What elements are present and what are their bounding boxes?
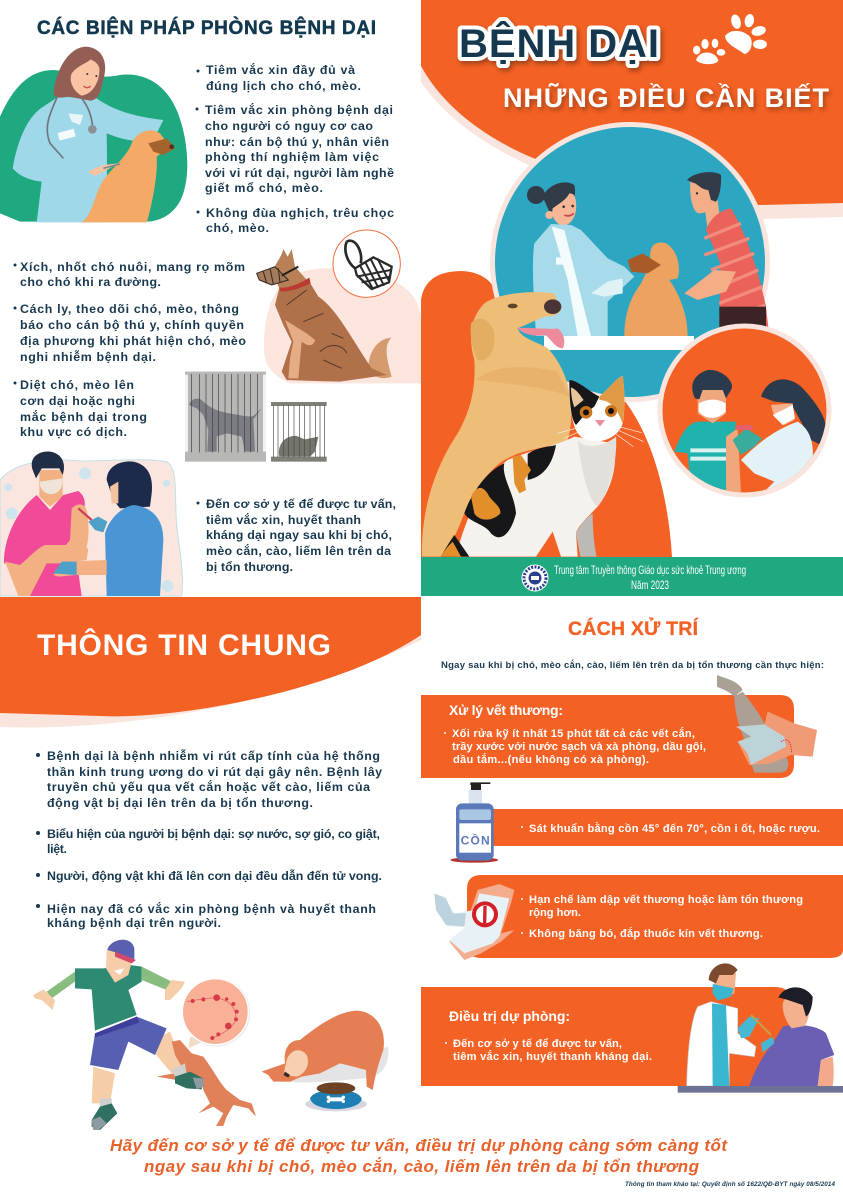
- text: treatment: [445, 1038, 652, 1063]
- heading: general information: THÔNG TIN CHUNG: [37, 628, 331, 662]
- text: isolate and monitor: Cách ly, theo dõi chó, mèo, thông: [20, 302, 239, 316]
- panel: cover: [421, 0, 843, 596]
- text: wash wound: dầu tắm...(nếu không có xà phòng).: [453, 753, 649, 766]
- text: what is rabies: thần kinh trung ương do vi rút dại gây nên. Bệnh lây: [47, 765, 382, 779]
- text: reference source: Thông tin tham khảo tại: Quyết định số 1622/QĐ-BYT ngày 08/5/2014: [625, 1180, 835, 1188]
- text: vaccinate pets: đúng lịch cho chó, mèo.: [206, 79, 361, 93]
- card: post exposure treatment: [421, 963, 843, 1093]
- illustration: caged animals: [185, 372, 327, 462]
- text: seek medical care: Đến cơ sở y tế để được tư vấn,: [206, 497, 396, 511]
- text: do not tease: Không đùa nghịch, trêu chọc: [206, 206, 394, 220]
- heading: wound care: Xử lý vết thương:: [449, 702, 563, 718]
- heading: how to respond: CÁCH XỬ TRÍ: [568, 616, 699, 640]
- text: avoid crushing wound: rộng hơn.: [529, 907, 581, 919]
- icon: alcohol bottle: [450, 782, 498, 863]
- text: vaccinate at risk people: phòng thí nghiệm làm việc: [205, 150, 379, 164]
- text: seek medical care: tiêm vắc xin, huyết thanh: [206, 512, 361, 527]
- text: treatment: Đến cơ sở y tế để được tư vấn,: [453, 1038, 622, 1050]
- text: symptoms: Biểu hiện của người bị bệnh dại: sợ nước, sợ gió, co giật,: [47, 827, 380, 841]
- illustration: vet, dog and man: [527, 172, 769, 337]
- text: vaccinate at risk people: với vi rút dại, người làm nghề: [205, 166, 394, 180]
- illustration: vet with dog: [0, 47, 187, 222]
- text: wash wound: Xối rửa kỹ ít nhất 15 phút tất cả các vết cắn,: [452, 727, 695, 740]
- illustration: muzzled dog: [257, 230, 421, 383]
- text: seek medical care: mèo cắn, cào, liếm lên trên da: [206, 543, 391, 558]
- panel: how to respond: [421, 616, 843, 1093]
- text: isolate and monitor: nghi nhiễm bệnh dại.: [20, 349, 156, 364]
- panel: prevention measures: [0, 17, 421, 596]
- callout: seek care early: ngay sau khi bị chó, mèo cắn, cào, liếm lên trên da bị tổn thương: [144, 1157, 700, 1176]
- text: avoid crushing wound: [521, 894, 803, 919]
- text: vaccine exists: [36, 901, 376, 930]
- text: avoid crushing wound: Hạn chế làm dập vết thương hoặc làm tổn thương: [529, 894, 803, 906]
- text: seek medical care: [196, 497, 396, 574]
- icon: paw prints: [693, 13, 767, 64]
- text: what is rabies: Bệnh dại là bệnh nhiễm vi rút cấp tính của hệ thống: [47, 748, 380, 763]
- text: vaccinate pets: [196, 62, 361, 93]
- heading: treatment: Điều trị dự phòng:: [449, 1008, 570, 1024]
- panel: general information: [0, 597, 421, 1130]
- illustration: dog and cat: [422, 292, 644, 557]
- text: cull rabid animals: Diệt chó, mèo lên: [20, 378, 134, 392]
- text: isolate and monitor: [14, 302, 246, 364]
- text: isolate and monitor: báo cho cán bộ thú y, chính quyền: [20, 318, 244, 332]
- text: what is rabies: động vật bị dại lên trên da bị tổn thương.: [47, 796, 313, 810]
- text: fatal outcome: Người, động vật khi đã lên cơn dại đều dẫn đến tử vong.: [47, 868, 382, 883]
- text: year: Năm 2023: [631, 578, 669, 592]
- text: symptoms: liệt.: [47, 842, 67, 856]
- text: cull rabid animals: cơn dại hoặc nghi: [20, 394, 135, 408]
- card: wound washing: [421, 675, 817, 778]
- heading: prevention: CÁC BIỆN PHÁP PHÒNG BỆNH DẠI: [37, 17, 376, 39]
- text: disinfect: Sát khuẩn bằng cồn 45° đến 70°, cồn i ốt, hoặc rượu.: [529, 822, 820, 835]
- text: do not cover wound: Không băng bó, đắp thuốc kín vết thương.: [529, 927, 763, 940]
- footer band: [421, 557, 843, 596]
- text: intro: Ngay sau khi bị chó, mèo cắn, cào, liếm lên trên da bị tổn thương cần thực hiện:: [441, 659, 824, 671]
- callout: seek care early: [110, 1136, 728, 1176]
- text: wash wound: trầy xước với nước sạch và xà phòng, dầu gội,: [452, 741, 706, 753]
- text: leash and muzzle: Xích, nhốt chó nuôi, mang rọ mõm: [20, 260, 245, 274]
- illustration: man bitten by dog: [33, 940, 256, 1130]
- text: wash wound: [444, 727, 706, 766]
- text: leash and muzzle: [14, 260, 245, 289]
- text: vaccinate at risk people: Tiêm vắc xin phòng bệnh dại: [205, 102, 393, 117]
- text: cull rabid animals: mắc bệnh dại trong: [20, 409, 147, 424]
- text: vaccinate at risk people: cho người có nguy cơ cao: [205, 119, 373, 133]
- illustration: dog eating: [262, 1011, 389, 1111]
- text: cull rabid animals: khu vực có dịch.: [20, 425, 127, 439]
- text: seek medical care: kháng dại ngay sau khi bị chó,: [206, 528, 392, 542]
- text: leash and muzzle: cho chó khi ra đường.: [20, 275, 161, 289]
- text: treatment: tiêm vắc xin, huyết thanh kháng dại.: [453, 1050, 652, 1063]
- header band: [0, 597, 421, 728]
- text: cull rabid animals: [14, 378, 147, 439]
- text: do not tease: [196, 206, 394, 235]
- card: disinfect: [450, 782, 843, 863]
- circle: child vaccination: [658, 324, 832, 498]
- white break across the circle: [544, 336, 694, 350]
- title: rabies: BỆNH DẠI: [459, 20, 659, 66]
- text: do not tease: chó, mèo.: [206, 221, 269, 235]
- text: what is rabies: [36, 748, 382, 810]
- text: isolate and monitor: địa phương khi phát hiện chó, mèo: [20, 334, 246, 348]
- icon: health centre logo: [522, 564, 548, 592]
- text: what is rabies: truyền chủ yếu qua vết cắn hoặc vết cào, liếm của: [47, 779, 370, 794]
- card: do not bandage: [434, 875, 843, 960]
- illustration: child and nurse: [674, 370, 826, 493]
- callout: seek care early: Hãy đến cơ sở y tế để được tư vấn, điều trị dự phòng càng sớm càng tốt: [110, 1136, 728, 1155]
- text: vaccine exists: Hiện nay đã có vắc xin phòng bệnh và huyết thanh: [47, 901, 376, 916]
- text: seek medical care: bị tổn thương.: [206, 560, 293, 574]
- illustration: bandaged hand with no sign: [434, 884, 514, 960]
- illustration: doctor and patient: [678, 963, 843, 1093]
- text: symptoms: [36, 827, 380, 856]
- text: vaccine exists: kháng bệnh dại trên người.: [47, 916, 221, 930]
- illustration: hand under faucet: [717, 675, 817, 773]
- header band: [421, 0, 843, 219]
- text: vaccinate at risk people: như: cán bộ thú y, nhân viên: [205, 135, 389, 149]
- text: vaccinate pets: Tiêm vắc xin đầy đủ và: [206, 62, 355, 77]
- text: vaccinate at risk people: giết mổ chó, mèo.: [205, 181, 323, 195]
- text: vaccinate at risk people: [196, 102, 394, 195]
- orange blob behind pets: [421, 271, 672, 557]
- icon: alcohol bottle: CỒN: [461, 832, 490, 847]
- circle: vet and owner: [490, 122, 770, 402]
- illustration: person being vaccinated: [0, 452, 182, 596]
- subtitle: what to know: NHỮNG ĐIỀU CẦN BIẾT: [503, 82, 830, 113]
